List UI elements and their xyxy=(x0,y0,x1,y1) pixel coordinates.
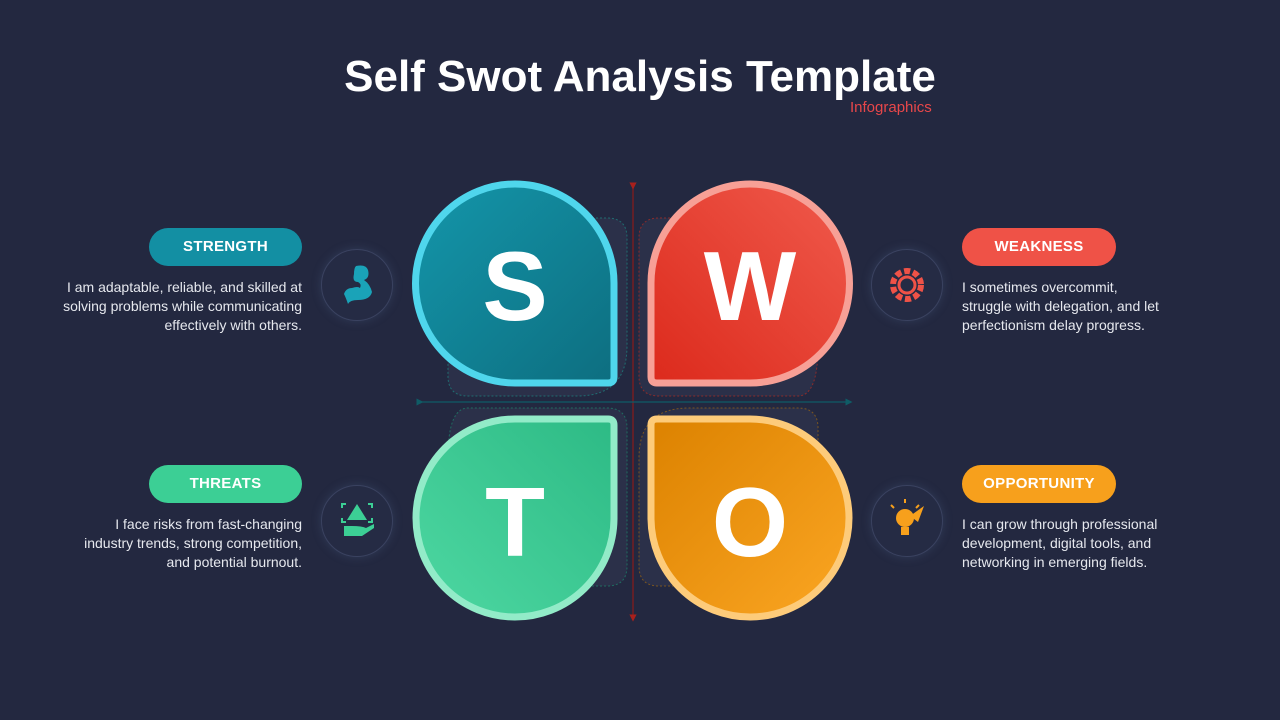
threats pill: THREATS xyxy=(190,475,261,492)
threats text: I face risks from fast-changing xyxy=(115,516,302,532)
opportunity pill xyxy=(962,465,1116,503)
strength text xyxy=(63,279,302,333)
opportunity text: networking in emerging fields. xyxy=(962,554,1147,570)
icon: bulb xyxy=(871,485,943,557)
weakness pill xyxy=(962,228,1116,266)
weakness text: perfectionism delay progress. xyxy=(962,317,1145,333)
strength text: I am adaptable, reliable, and skilled at xyxy=(67,279,302,295)
petal O: O xyxy=(712,467,788,577)
panel: threats xyxy=(84,465,302,570)
axes xyxy=(632,186,634,618)
title: Self Swot Analysis Template xyxy=(344,52,936,101)
icon: muscle xyxy=(321,249,393,321)
threats text: and potential burnout. xyxy=(167,554,302,570)
panel: strength xyxy=(63,228,302,333)
opportunity pill: OPPORTUNITY xyxy=(983,475,1095,492)
strength pill xyxy=(149,228,302,266)
subtitle: Infographics xyxy=(850,99,932,116)
weakness text: I sometimes overcommit, xyxy=(962,279,1118,295)
petal O xyxy=(651,419,849,617)
backdrop shapes xyxy=(448,218,818,586)
threats text: industry trends, strong competition, xyxy=(84,535,302,551)
weakness text xyxy=(962,279,1159,333)
petal S: S xyxy=(482,231,548,341)
panel: opportunity xyxy=(962,465,1157,570)
strength pill: STRENGTH xyxy=(183,238,268,255)
threats text xyxy=(84,516,302,570)
petal W xyxy=(651,184,850,383)
opportunity text: I can grow through professional xyxy=(962,516,1157,532)
opportunity text: development, digital tools, and xyxy=(962,535,1151,551)
opportunity text xyxy=(962,516,1157,570)
petal T: T xyxy=(485,467,545,577)
icon: gear xyxy=(871,249,943,321)
panel: weakness xyxy=(962,228,1159,333)
strength text: effectively with others. xyxy=(165,317,302,333)
threats pill xyxy=(149,465,302,503)
weakness text: struggle with delegation, and let xyxy=(962,298,1159,314)
icon: hand warning xyxy=(321,485,393,557)
petal S xyxy=(416,184,614,383)
weakness pill: WEAKNESS xyxy=(994,238,1084,255)
strength text: solving problems while communicating xyxy=(63,298,302,314)
petal T xyxy=(416,419,614,617)
petal W: W xyxy=(704,231,797,341)
